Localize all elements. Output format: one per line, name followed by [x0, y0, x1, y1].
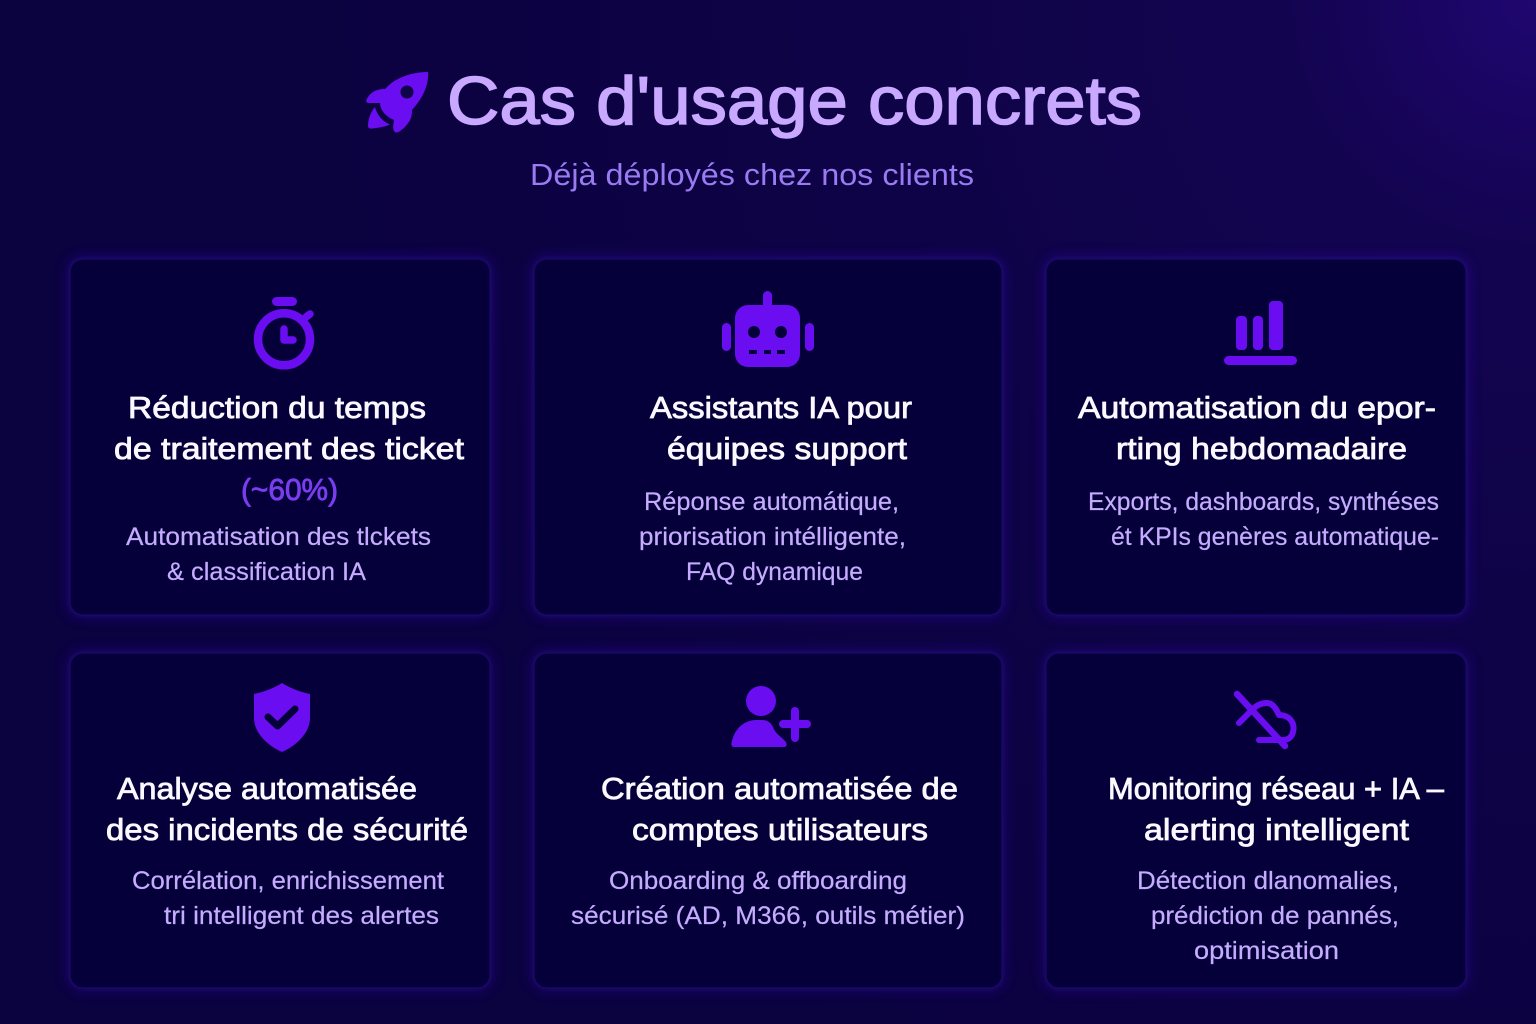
description: Automatisation des tlckets: [126, 523, 431, 551]
description: FAQ dynamique: [686, 558, 863, 586]
description: optimisation: [1194, 937, 1339, 965]
description: [126, 523, 431, 586]
heading: comptes utilisateurs: [632, 812, 928, 847]
description: priorisation intélligente,: [639, 523, 906, 551]
description: [571, 867, 965, 930]
panel: réduction du temps de traitement: [67, 256, 493, 618]
heading: Assistants IA pour: [650, 390, 912, 425]
heading: [1108, 771, 1445, 847]
heading: rting hebdomadaire: [1116, 431, 1407, 466]
heading: [601, 771, 958, 847]
description: [1088, 488, 1439, 551]
heading: équipes support: [667, 431, 907, 466]
heading: [114, 390, 464, 507]
heading: alerting intelligent: [1144, 812, 1409, 847]
subtitle: Déjà déployés chez nos clients: [530, 157, 974, 192]
heading: [650, 390, 912, 466]
panel: création de comptes: [531, 650, 1005, 991]
icon: rocket: [366, 72, 428, 132]
description: Détection dlanomalies,: [1137, 867, 1399, 895]
description: [639, 488, 906, 586]
icon: stopwatch: [258, 297, 310, 365]
panel: assistants IA: [531, 256, 1005, 618]
panel: analyse des incidents: [67, 650, 493, 991]
description: prédiction de pannés,: [1151, 902, 1399, 930]
heading: [106, 771, 468, 847]
heading: Monitoring réseau + IA –: [1108, 771, 1445, 806]
description: Onboarding & offboarding: [609, 867, 907, 895]
description: Exports, dashboards, synthéses: [1088, 488, 1439, 516]
icon: shield check: [254, 683, 310, 752]
description: [1137, 867, 1399, 965]
icon: add user: [731, 686, 807, 747]
description: Réponse automátique,: [644, 488, 899, 516]
icon: bar chart: [1224, 301, 1297, 365]
icon: robot: [722, 291, 814, 367]
title: Cas d'usage concrets: [447, 63, 1142, 139]
description: & classification IA: [167, 558, 366, 586]
description: tri intelligent des alertes: [164, 902, 439, 930]
heading: (~60%): [241, 472, 338, 507]
heading: des incidents de sécurité: [106, 812, 468, 847]
heading: Réduction du temps: [128, 390, 426, 425]
panel: monitoring réseau: [1043, 650, 1469, 991]
panel: automatisation du reporting: [1043, 256, 1469, 618]
icon: crossed-out cloud: [1237, 694, 1294, 746]
description: Corrélation, enrichissement: [132, 867, 444, 895]
description: sécurisé (AD, M366, outils métier): [571, 902, 965, 930]
heading: Analyse automatisée: [117, 771, 417, 806]
heading: de traitement des ticket: [114, 431, 464, 466]
heading: [1078, 390, 1436, 466]
description: ét KPIs genères automatique-: [1111, 523, 1439, 551]
description: [132, 867, 444, 930]
heading: Création automatisée de: [601, 771, 958, 806]
heading: Automatisation du epor-: [1078, 390, 1436, 425]
